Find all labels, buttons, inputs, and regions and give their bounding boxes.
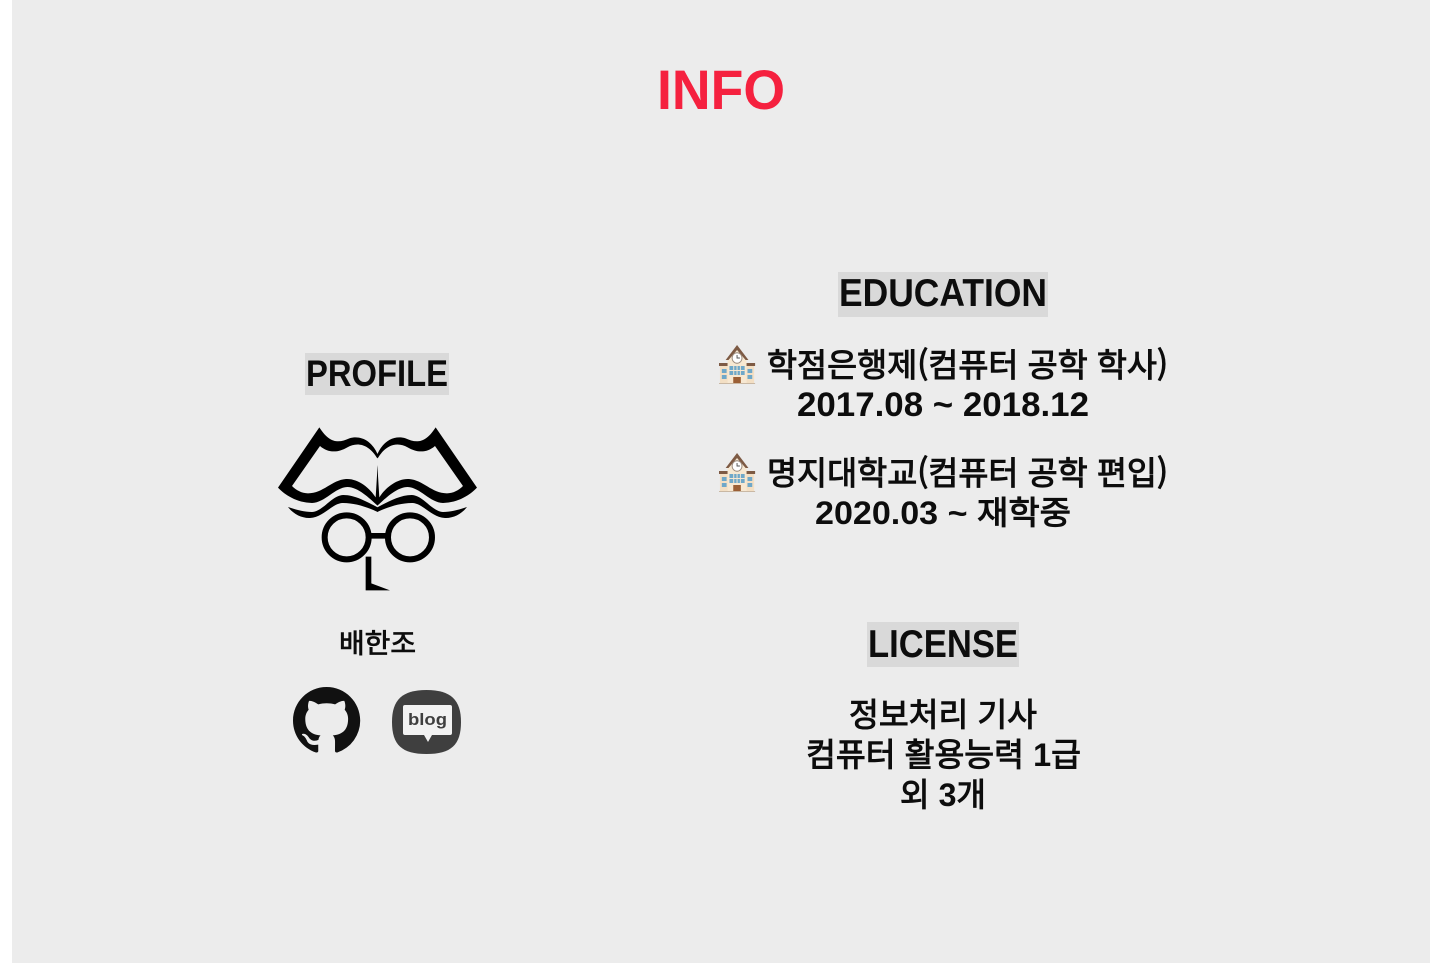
license 3: 외 3개 [900, 769, 986, 816]
education dates 2: 2020.03 ~ 재학중 [815, 487, 1071, 534]
icon: school [719, 345, 755, 384]
icon: blog: blog [408, 710, 447, 729]
education entry 1: 학점은행제(컴퓨터 공학 학사) [767, 340, 1168, 386]
title: INFO [657, 58, 785, 121]
license 2: 컴퓨터 활용능력 1급 [806, 729, 1081, 776]
panel: profile [278, 353, 477, 754]
panel: education [719, 272, 1168, 534]
profile name: 배한조 [339, 622, 416, 661]
education entry 2: 명지대학교(컴퓨터 공학 편입) [767, 448, 1168, 494]
icon: school [719, 453, 755, 492]
license 1: 정보처리 기사 [849, 689, 1037, 736]
heading: license: LICENSE [868, 623, 1018, 666]
heading: profile: PROFILE [306, 353, 448, 394]
icon: blog [392, 690, 461, 754]
panel: license [806, 622, 1081, 816]
education dates 1: 2017.08 ~ 2018.12 [797, 386, 1089, 424]
icon: github [293, 687, 360, 753]
heading: education: EDUCATION [839, 272, 1047, 315]
icon: book and glasses logo [278, 427, 477, 590]
